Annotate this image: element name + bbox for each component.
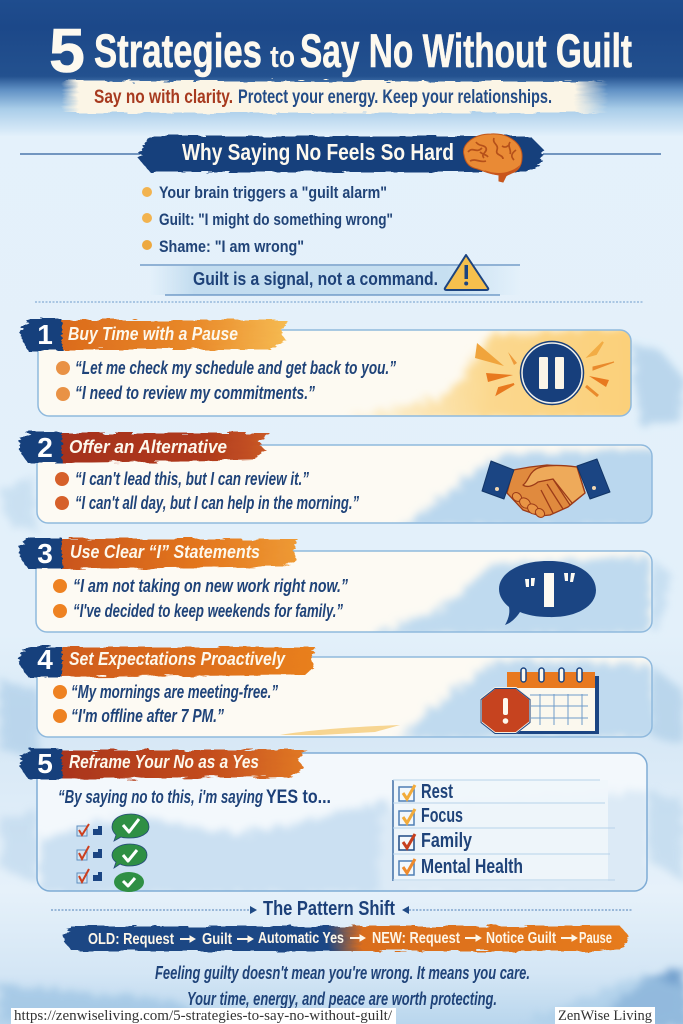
flow band: old and new patterns: Notice Guilt bbox=[486, 930, 557, 947]
heading: the pattern shift: The Pattern Shift bbox=[263, 898, 395, 920]
panel: strategy 3: “I am not taking on new work right now.” bbox=[73, 576, 348, 596]
callout: guilt is a signal bbox=[140, 265, 520, 295]
panel: strategy 3: Use Clear “I” Statements bbox=[70, 541, 260, 562]
closing text bbox=[155, 963, 530, 1009]
panel: strategy 1: “Let me check my schedule and get back to you.” bbox=[75, 358, 396, 378]
callout: guilt is a signal: Guilt is a signal, not a command. bbox=[193, 269, 438, 289]
title: to bbox=[270, 39, 295, 74]
panel: strategy 4: “My mornings are meeting-free.” bbox=[71, 682, 278, 702]
list item: family: Family bbox=[421, 830, 473, 852]
panel: strategy 2: “I can't all day, but I can help in the morning.” bbox=[75, 493, 359, 513]
flow band: old and new patterns: Pause bbox=[579, 930, 612, 947]
icon: pause button bbox=[475, 342, 614, 404]
panel: strategy 1: 1 bbox=[37, 319, 53, 350]
flow band: old and new patterns: OLD: Request bbox=[88, 931, 175, 948]
source url: https://zenwiseliving.com/5-strategies-to-say-no-without-guilt/ bbox=[14, 1008, 393, 1024]
panel: strategy 4: 4 bbox=[37, 644, 53, 675]
panel: strategy 5 bbox=[20, 748, 650, 895]
panel: strategy 5: YES to... bbox=[266, 787, 331, 808]
panel: strategy 1: Buy Time with a Pause bbox=[68, 323, 238, 344]
heading: the pattern shift bbox=[51, 898, 632, 920]
icon: yes checks bbox=[77, 814, 149, 892]
title bbox=[49, 17, 632, 86]
panel: strategy 5: Reframe Your No as a Yes bbox=[69, 751, 259, 772]
title: 5 bbox=[49, 17, 85, 86]
panel: strategy 2 bbox=[19, 432, 660, 528]
brand label: ZenWise Living bbox=[558, 1008, 652, 1024]
panel: yes list bbox=[393, 780, 615, 881]
list item: family bbox=[399, 830, 473, 852]
list item: focus: Focus bbox=[421, 805, 463, 827]
panel: strategy 3: 3 bbox=[37, 538, 53, 569]
panel: strategy 1: “I need to review my commitments.” bbox=[75, 383, 315, 403]
panel: strategy 4: Set Expectations Proactively bbox=[69, 648, 286, 669]
panel: strategy 2: Offer an Alternative bbox=[69, 436, 227, 457]
icon: speech bubble with I bbox=[499, 561, 596, 625]
reasons list bbox=[142, 183, 393, 256]
panel: strategy 1 bbox=[20, 319, 640, 420]
reasons list: Shame: "I am wrong" bbox=[159, 237, 304, 256]
subtitle band bbox=[62, 81, 607, 113]
panel: strategy 4 bbox=[19, 644, 660, 740]
icon: handshake bbox=[482, 459, 610, 519]
section heading: why saying no feels so hard: Why Saying No Feels So Hard bbox=[182, 139, 454, 165]
flow band: old and new patterns bbox=[62, 926, 628, 951]
flow band: old and new patterns: Guilt bbox=[202, 931, 233, 948]
list item: rest: Rest bbox=[421, 781, 453, 803]
closing text: Your time, energy, and peace are worth protecting. bbox=[187, 989, 497, 1009]
list item: focus bbox=[399, 805, 463, 827]
panel: strategy 5: “By saying no to this, i'm saying bbox=[58, 787, 263, 807]
flow band: old and new patterns: NEW: Request bbox=[372, 930, 461, 947]
section heading: why saying no feels so hard bbox=[20, 136, 661, 172]
icon: calendar with stop sign bbox=[481, 668, 599, 734]
title: Strategies bbox=[94, 24, 262, 77]
icon: warning triangle bbox=[445, 255, 488, 290]
panel: strategy 2: 2 bbox=[37, 432, 53, 463]
icon: brain bbox=[464, 134, 522, 182]
closing text: Feeling guilty doesn't mean you're wrong. It means you care. bbox=[155, 963, 530, 983]
flow band: old and new patterns: Automatic Yes bbox=[258, 930, 344, 947]
panel: strategy 2: “I can't lead this, but I can review it.” bbox=[75, 469, 309, 489]
reasons list: Guilt: "I might do something wrong" bbox=[159, 210, 393, 229]
panel: strategy 4: “I'm offline after 7 PM.” bbox=[71, 706, 224, 726]
list item: rest bbox=[399, 781, 453, 803]
list item: mental health bbox=[399, 856, 523, 878]
subtitle band: Protect your energy. Keep your relationships. bbox=[238, 86, 552, 108]
panel: strategy 5: 5 bbox=[37, 748, 53, 779]
list item: mental health: Mental Health bbox=[421, 856, 523, 878]
divider bbox=[35, 301, 643, 303]
subtitle band: Say no with clarity. bbox=[94, 86, 233, 108]
panel: strategy 3 bbox=[19, 538, 652, 636]
panel: strategy 3: “I've decided to keep weekends for family.” bbox=[73, 601, 343, 621]
reasons list: Your brain triggers a "guilt alarm" bbox=[159, 183, 387, 202]
